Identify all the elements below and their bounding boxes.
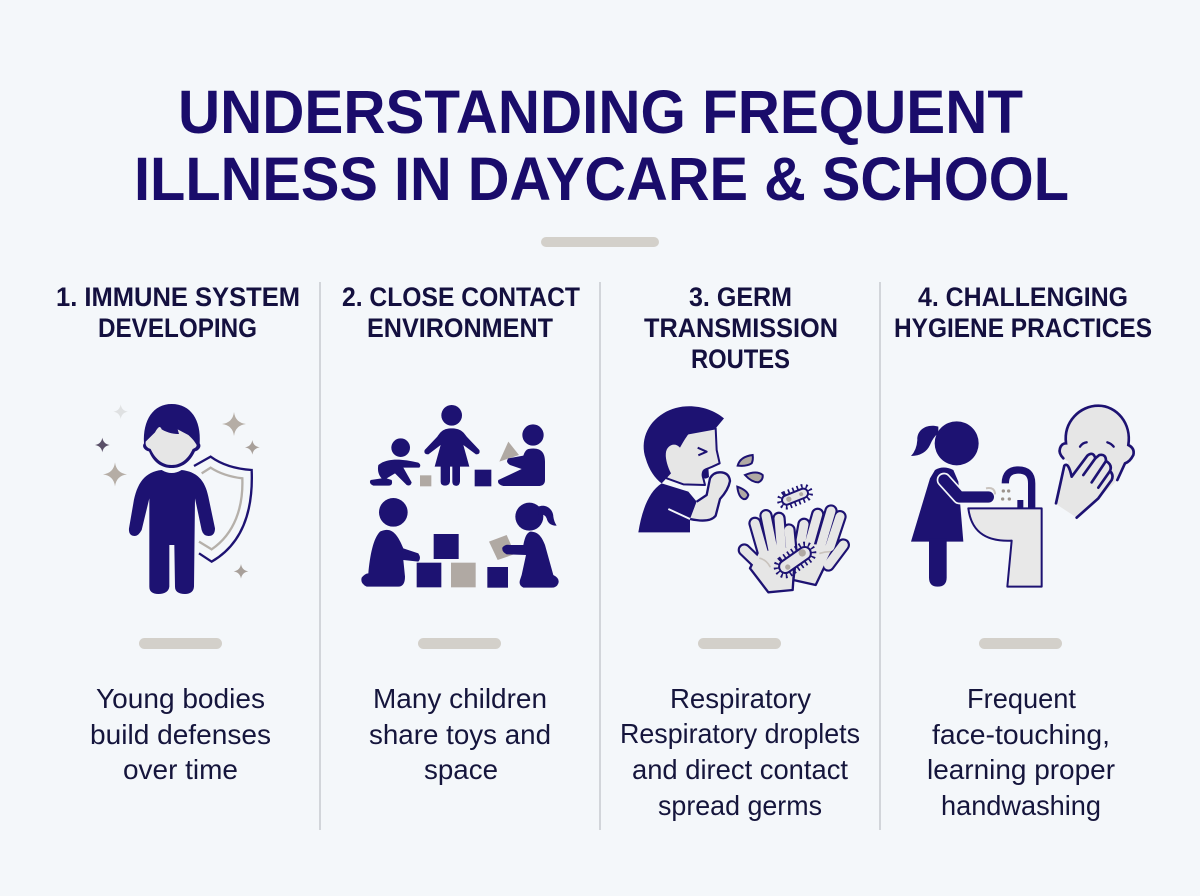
text: hygiene description: Frequent (967, 683, 1076, 714)
heading: close contact (342, 282, 580, 343)
panel: close contact environment (342, 282, 580, 785)
heading: hygiene: 4. CHALLENGING (918, 282, 1128, 312)
text: germ description: spread germs (658, 790, 822, 821)
text: hygiene description (927, 683, 1115, 821)
text: immune description: over time (123, 754, 238, 785)
text: germ description: Respiratory droplets (620, 718, 860, 749)
text: contact description: space (424, 754, 498, 785)
text: contact description (369, 683, 551, 785)
text: contact description: share toys and (369, 719, 551, 750)
icon: child touching face (1055, 406, 1134, 518)
heading: germ transmission: TRANSMISSION (644, 313, 838, 343)
title: UNDERSTANDING FREQUENT (178, 78, 1023, 146)
text: immune description (90, 683, 271, 785)
text: germ description: and direct contact (632, 754, 848, 785)
icon: child with shield and sparkles (95, 404, 260, 594)
text: hygiene description: learning proper (927, 754, 1115, 785)
text: contact description: Many children (373, 683, 547, 714)
title: ILLNESS IN DAYCARE & SCHOOL (134, 145, 1069, 213)
icon: children playing with blocks (361, 405, 559, 588)
panel: germ transmission routes (620, 282, 860, 821)
heading: close contact: 2. CLOSE CONTACT (342, 282, 580, 312)
title (134, 78, 1069, 213)
heading: germ transmission: 3. GERM (689, 282, 792, 312)
heading: hygiene (894, 282, 1152, 343)
heading: germ transmission (644, 282, 838, 374)
text: hygiene description: face-touching, (932, 719, 1110, 750)
text: germ description: Respiratory (670, 683, 811, 714)
text: hygiene description: handwashing (941, 790, 1101, 821)
icon: girl washing hands at sink (911, 421, 1042, 587)
heading: close contact: ENVIRONMENT (367, 313, 553, 343)
text: immune description: Young bodies (96, 683, 265, 714)
text: immune description: build defenses (90, 719, 271, 750)
heading: immune system (56, 282, 300, 343)
panel: challenging hygiene practices (894, 282, 1152, 821)
heading: hygiene: HYGIENE PRACTICES (894, 313, 1152, 343)
panel: immune system developing (56, 282, 300, 785)
heading: germ transmission: ROUTES (691, 344, 790, 374)
heading: immune system: DEVELOPING (98, 313, 257, 343)
icon: sneezing child, germs and hands (638, 406, 843, 592)
text: germ description (620, 683, 860, 821)
heading: immune system: 1. IMMUNE SYSTEM (56, 282, 300, 312)
